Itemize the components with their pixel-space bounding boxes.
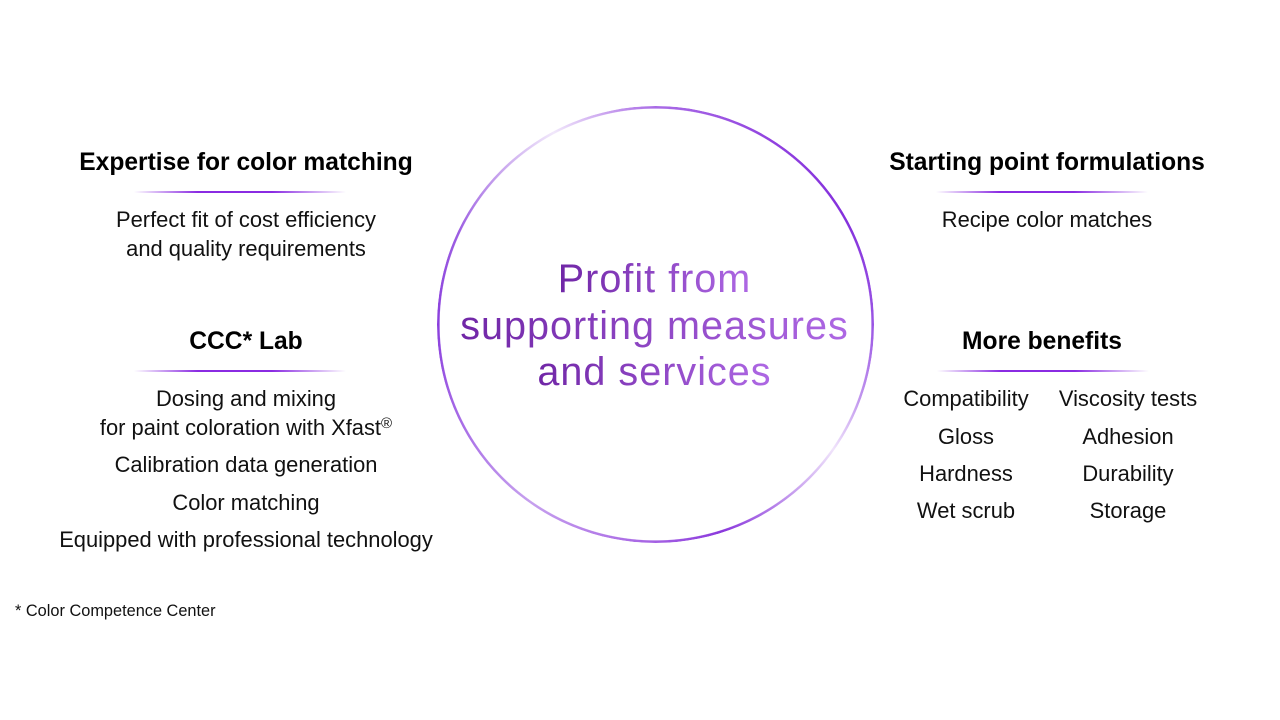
list: benefits right column — [1059, 386, 1197, 523]
list: benefits left column: Wet scrub — [917, 498, 1015, 523]
list: benefits right column: Viscosity tests — [1059, 386, 1197, 411]
panel: CCC lab — [59, 328, 433, 552]
central title: and services — [537, 350, 772, 394]
text: equipment: Equipped with professional technology — [59, 527, 433, 552]
list: benefits left column — [903, 386, 1029, 523]
accent line: starting point — [936, 191, 1148, 193]
heading: CCC lab: CCC* Lab — [189, 328, 303, 355]
accent line: expertise — [134, 191, 346, 193]
circle: central ring — [437, 106, 874, 543]
list: benefits left column: Hardness — [919, 461, 1013, 486]
text: recipe color matches: Recipe color matches — [942, 207, 1152, 232]
panel: more benefits — [903, 328, 1197, 523]
text: dosing and mixing — [100, 386, 392, 440]
central title — [460, 257, 849, 394]
accent line: more benefits — [937, 370, 1149, 372]
list: benefits left column: Compatibility — [903, 386, 1029, 411]
text: color matching: Color matching — [172, 490, 320, 515]
central title: supporting measures — [460, 304, 849, 348]
list: benefits right column: Storage — [1090, 498, 1166, 523]
text: dosing and mixing: for paint coloration with Xfast® — [100, 415, 392, 440]
heading: starting point: Starting point formulations — [889, 149, 1205, 176]
list: benefits right column: Adhesion — [1082, 424, 1174, 449]
text: calibration data: Calibration data generation — [115, 452, 377, 477]
list: benefits left column: Gloss — [938, 424, 994, 449]
text: expertise description — [116, 207, 376, 261]
heading: expertise: Expertise for color matching — [79, 149, 413, 176]
central title: Profit from — [558, 257, 751, 301]
text: expertise description: and quality requirements — [126, 236, 366, 261]
footnote: * Color Competence Center — [15, 602, 216, 620]
panel: starting point formulations — [889, 149, 1205, 232]
text: expertise description: Perfect fit of cost efficiency — [116, 207, 376, 232]
text: dosing and mixing: Dosing and mixing — [156, 386, 336, 411]
panel: expertise for color matching — [79, 149, 413, 261]
accent line: CCC lab — [134, 370, 346, 372]
list: benefits right column: Durability — [1082, 461, 1174, 486]
heading: more benefits: More benefits — [962, 328, 1122, 355]
